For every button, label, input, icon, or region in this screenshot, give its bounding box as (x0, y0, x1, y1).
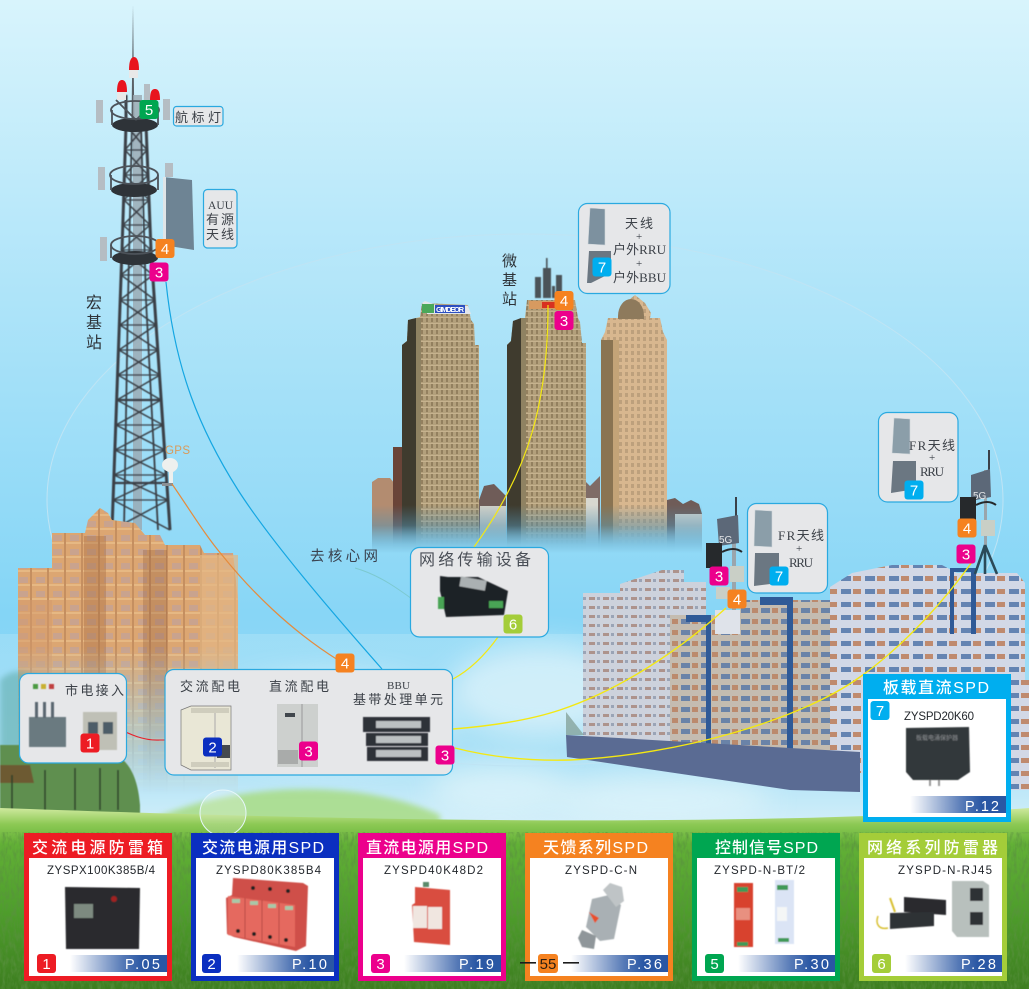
panel: micro station equipment: 户外BBU (613, 270, 667, 285)
product card: feeder SPD: P.36 (627, 957, 662, 973)
product card: feeder SPD (520, 833, 673, 981)
numbered badges on the diagram: 4 (560, 293, 568, 310)
badge with overprinted number: 55 (540, 956, 556, 973)
product card: AC surge box: 1 (42, 956, 51, 973)
grass texture (0, 832, 1029, 989)
apartment block E (830, 565, 1025, 773)
product card: network surge protector: 网络系列防雷器 (867, 838, 998, 857)
product card: AC surge box: ZYSPX100K385B/4 (47, 865, 156, 877)
numbered badges on the diagram: 7 (910, 482, 918, 500)
numbered badges on the diagram: 3 (441, 748, 449, 764)
icon: board SPD module: 板载电涌保护器 (916, 734, 958, 742)
panel: AUU label: 有源 (206, 212, 234, 227)
icon: AC cabinet (181, 706, 231, 770)
icon: network device (438, 576, 508, 617)
icon: coaxial protector (578, 883, 624, 949)
GPS antenna: GPS (165, 445, 190, 457)
sector antennas (96, 84, 173, 261)
panel: micro station equipment: + (636, 258, 642, 270)
numbered badges on the diagram: 3 (560, 313, 568, 330)
numbered badges on the diagram: 4 (963, 520, 971, 538)
panel: mains access: 市电接入 (65, 683, 124, 698)
product card: DC SPD: 3 (376, 956, 385, 973)
product card: AC SPD (191, 833, 339, 981)
icon: antenna and outdoor RRU (587, 208, 611, 283)
green slope (140, 789, 440, 830)
red beacon lights (117, 57, 160, 100)
panel: network transmission equipment (410, 548, 548, 637)
cable: BBU to 5G mast right (455, 562, 972, 760)
panel: network transmission equipment: 网络传输设备 (419, 550, 531, 569)
product card: control signal SPD: 控制信号SPD (715, 839, 818, 857)
label: macro base station: 宏 (86, 294, 102, 312)
label: to core network: 去核心网 (310, 548, 378, 565)
panel: FR antenna left: RRU (789, 555, 814, 570)
icon: FR antenna and RRU (891, 418, 916, 493)
label: micro base station: 基 (502, 272, 517, 289)
product card: network surge protector: P.28 (961, 957, 996, 973)
icon: BBU rack (363, 717, 430, 761)
panel: FR antenna right: FR天线 (909, 438, 955, 453)
street level (566, 735, 860, 792)
icon: black box (65, 887, 140, 949)
lattice (112, 95, 170, 530)
badge with overprinted number (520, 954, 579, 973)
numbered badges on the diagram: 7 (775, 568, 783, 586)
panel: FR antenna left: FR天线 (778, 528, 824, 543)
numbered badges on the diagram: 3 (715, 568, 723, 586)
numbered badges on the diagram: 4 (341, 656, 349, 672)
panel: micro station equipment (578, 204, 670, 294)
cable: micro station (474, 305, 548, 547)
building: right tower (601, 295, 667, 552)
panel: FR antenna right (878, 412, 958, 502)
building: middle tower (507, 300, 586, 553)
panel: AUU label: 天线 (206, 227, 234, 242)
left residential building (18, 508, 238, 800)
cable: GPS (172, 484, 338, 660)
5G mast right (960, 450, 997, 574)
central pole (133, 95, 142, 530)
apartment block A (583, 593, 621, 738)
apartment block C (670, 615, 742, 747)
product card: AC surge box: P.05 (125, 957, 160, 973)
product card: feeder SPD: ZYSPD-C-N (565, 865, 637, 877)
label: micro base station: 微 (502, 253, 517, 270)
panel: power and baseband units: 交流配电 (180, 679, 240, 694)
AUU active antenna (163, 177, 194, 250)
product card: board DC SPD: 板载直流SPD (883, 679, 989, 697)
product card: feeder SPD: 天馈系列SPD (543, 839, 648, 857)
right city (566, 565, 1029, 792)
product card: AC surge box: 交流电源防雷箱 (32, 838, 163, 857)
low background buildings (372, 447, 702, 542)
bubble (200, 790, 246, 836)
panel: beacon light label: 航标灯 (175, 110, 221, 125)
lower sky haze (0, 634, 1029, 824)
numbered badges on the diagram: 4 (161, 241, 169, 258)
label: micro base station: 站 (502, 291, 517, 308)
background trees (0, 672, 47, 750)
product card: DC SPD: P.19 (459, 957, 494, 973)
product card: control signal SPD: P.30 (794, 957, 829, 973)
icon: board SPD module (906, 727, 970, 786)
building: left tower: GIMDEOR (436, 305, 465, 314)
numbered badges on the diagram: 2 (208, 740, 217, 756)
product card: control signal SPD: 5 (710, 956, 719, 973)
panel: mains access (20, 674, 126, 763)
numbered badges on the diagram: 3 (304, 744, 313, 760)
product card: board DC SPD: 7 (876, 703, 884, 720)
5G mast left (706, 497, 744, 610)
cable: mains (114, 726, 181, 740)
numbered badges on the diagram: 6 (509, 616, 517, 634)
product card: DC SPD: ZYSPD40K48D2 (384, 865, 483, 877)
label: macro base station: 基 (86, 314, 102, 332)
icon: transformer (29, 684, 66, 747)
panel: FR antenna right: RRU (920, 464, 945, 479)
ground grass (0, 808, 1029, 989)
product card: network surge protector: ZYSPD-N-RJ45 (898, 865, 992, 877)
product card: board DC SPD: ZYSPD20K60 (904, 711, 974, 723)
cable: network to BBU (453, 637, 498, 679)
product card: DC SPD (358, 833, 506, 981)
panel: micro station equipment: 天线 (625, 216, 653, 231)
product card: AC SPD: ZYSPD80K385B4 (216, 865, 322, 877)
cable: core network (355, 568, 423, 607)
5G mast left: 5G (719, 535, 733, 546)
panel: power and baseband units: 基带处理单元 (353, 692, 443, 707)
GPS antenna (162, 445, 190, 486)
label: macro base station: 站 (86, 334, 102, 352)
numbered badges on the diagram: 3 (962, 546, 970, 564)
cable: BBU to 5G mast left (453, 608, 726, 729)
numbered badges on the diagram: 4 (733, 592, 741, 608)
tower platforms (111, 118, 158, 265)
icon: RJ45 rail module (952, 881, 989, 937)
product card: DC SPD: 直流电源用SPD (366, 839, 488, 857)
icon: DC cabinet (277, 704, 318, 767)
product card: board DC SPD (863, 674, 1011, 822)
macro tower (96, 5, 173, 530)
icon: FR antenna and RRU (754, 510, 779, 586)
icon: RJ45 protector boxes (877, 897, 946, 929)
product card: network surge protector (859, 833, 1007, 981)
numbered badges on the diagram: 3 (155, 264, 163, 282)
clouds (210, 645, 770, 825)
icon: four-pole SPD (226, 878, 308, 951)
5G mast right: 5G (973, 491, 987, 502)
product card: AC SPD: P.10 (292, 957, 327, 973)
trees (0, 745, 140, 820)
panel: FR antenna left (748, 504, 828, 593)
panel: FR antenna left: + (796, 543, 802, 555)
panel: power and baseband units: BBU (387, 680, 410, 692)
micro base station antenna (535, 258, 562, 298)
icon: red signal SPD (734, 883, 753, 947)
numbered badges on the diagram: 1 (86, 736, 94, 752)
central skyline (372, 295, 702, 555)
icon: two-pole SPD (412, 882, 450, 945)
panel: power and baseband units (165, 670, 452, 775)
coverage arc (47, 234, 1003, 766)
panel: micro station equipment: + (636, 231, 642, 243)
cable: macro tower to BBU (166, 282, 382, 669)
product card: AC SPD: 交流电源用SPD (202, 838, 324, 857)
product card: board DC SPD: P.12 (965, 799, 999, 815)
numbered badges on the diagram: 7 (598, 260, 606, 276)
numbered badges on the diagram (80, 100, 976, 764)
panel: AUU label: AUU (208, 200, 234, 212)
product card: control signal SPD (692, 833, 840, 981)
product card: AC surge box (24, 833, 172, 981)
panel: power and baseband units: 直流配电 (269, 679, 329, 694)
apartment block B (620, 570, 706, 742)
product card: control signal SPD: ZYSPD-N-BT/2 (714, 865, 805, 877)
panel: micro station equipment: 户外RRU (613, 242, 667, 257)
numbered badges on the diagram: 5 (145, 102, 153, 119)
icon: white signal SPD (775, 880, 794, 944)
apartment block D (740, 600, 830, 752)
panel: AUU label (204, 190, 237, 248)
icon: distribution box (83, 712, 117, 750)
product card: AC SPD: 2 (207, 956, 216, 973)
building: left tower (402, 301, 479, 552)
product card: network surge protector: 6 (877, 956, 886, 973)
panel: FR antenna right: + (929, 452, 935, 464)
